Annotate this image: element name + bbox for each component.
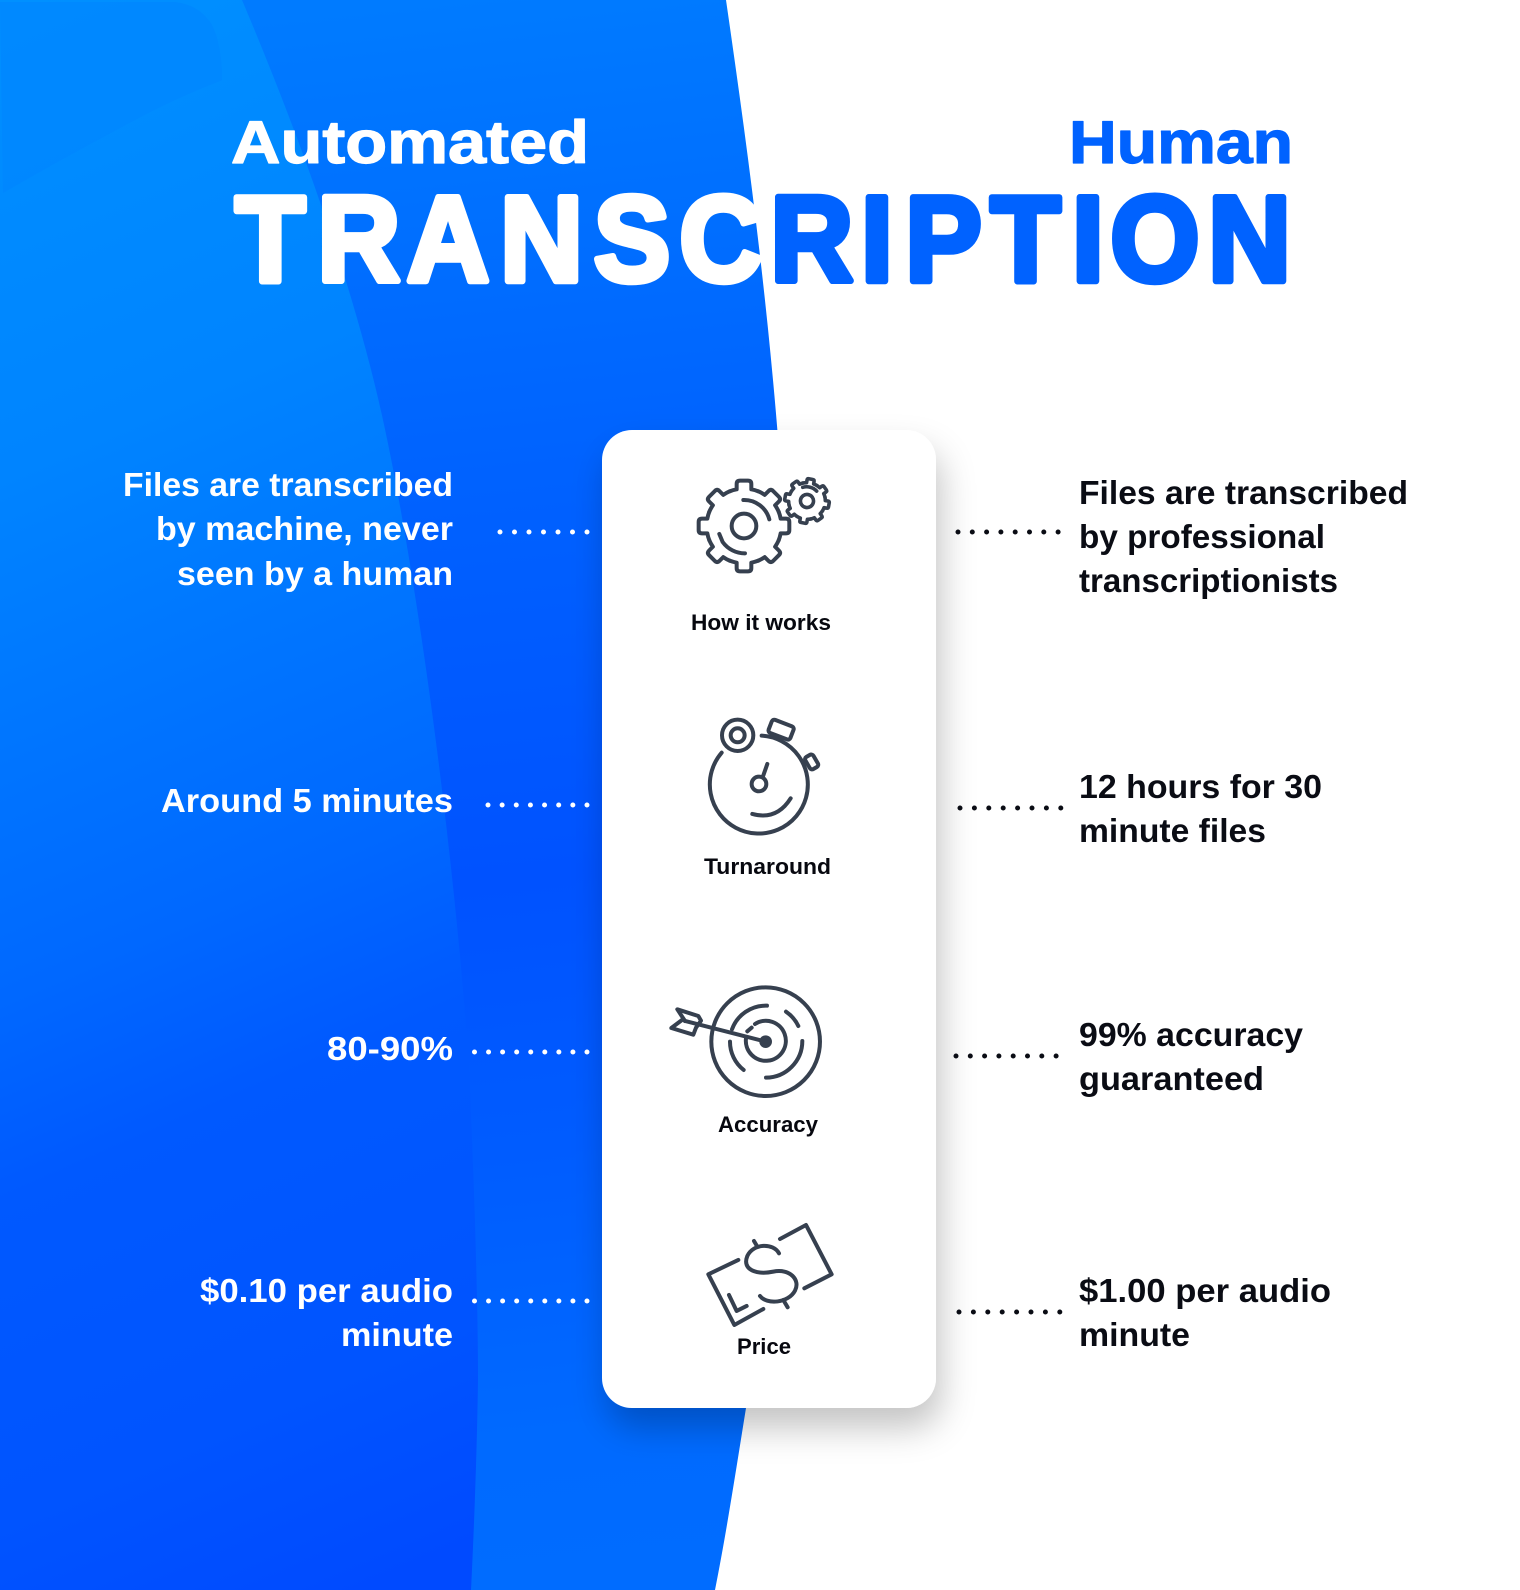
text: human how it works: transcriptionists bbox=[1079, 562, 1338, 599]
connector dots bbox=[958, 530, 1059, 534]
background: top-left faint patch bbox=[0, 2, 222, 193]
connector dots bbox=[474, 1298, 588, 1304]
icon: target with arrow bbox=[671, 987, 820, 1096]
text: automated how it works: by machine, never bbox=[156, 510, 453, 547]
title: TRANSCRIPTION bbox=[235, 172, 1291, 308]
title: Automated: Automated bbox=[231, 109, 589, 176]
connector dots bbox=[960, 806, 1062, 810]
label: Accuracy: Accuracy bbox=[718, 1112, 819, 1137]
icon: gears bbox=[699, 475, 833, 571]
label: Turnaround: Turnaround bbox=[704, 854, 831, 879]
connector dots bbox=[488, 802, 588, 808]
icon: stopwatch bbox=[710, 719, 819, 834]
text: human turnaround bbox=[1079, 768, 1322, 849]
text: automated price: minute bbox=[341, 1316, 453, 1353]
connector dots bbox=[956, 1054, 1057, 1058]
label: How it works: How it works bbox=[691, 610, 831, 635]
text: automated price bbox=[200, 1272, 453, 1353]
text: human price: minute bbox=[1079, 1316, 1190, 1353]
text: automated how it works bbox=[123, 466, 453, 592]
centre card bbox=[602, 430, 936, 1408]
title: Human: Human bbox=[1069, 109, 1293, 176]
title: TRANSCRIPTION: RIPTION bbox=[770, 172, 1291, 308]
text: human accuracy: guaranteed bbox=[1079, 1060, 1264, 1097]
text: human how it works: Files are transcribed bbox=[1079, 474, 1408, 511]
text: human accuracy: 99% accuracy bbox=[1079, 1016, 1304, 1053]
connector dots bbox=[474, 1050, 588, 1054]
text: human accuracy bbox=[1079, 1016, 1304, 1097]
text: human turnaround: 12 hours for 30 bbox=[1079, 768, 1322, 805]
background: lighter left layer bbox=[0, 0, 478, 1590]
text: human price bbox=[1079, 1272, 1331, 1353]
text: automated turnaround: Around 5 minutes bbox=[161, 782, 453, 819]
label: Price: Price bbox=[737, 1334, 791, 1359]
text: automated how it works: seen by a human bbox=[177, 555, 453, 592]
text: human turnaround: minute files bbox=[1079, 812, 1266, 849]
text: automated how it works: Files are transcribed bbox=[123, 466, 453, 503]
icon: dollar bill bbox=[708, 1225, 832, 1325]
connector dots bbox=[959, 1310, 1061, 1314]
text: human price: $1.00 per audio bbox=[1079, 1272, 1331, 1309]
text: human how it works: by professional bbox=[1079, 518, 1325, 555]
background: blue curved panel bbox=[0, 0, 792, 1590]
text: automated accuracy: 80-90% bbox=[327, 1030, 453, 1067]
title: TRANSCRIPTION: TRANSC bbox=[235, 172, 762, 308]
text: human how it works bbox=[1079, 474, 1408, 599]
text: automated price: $0.10 per audio bbox=[200, 1272, 453, 1309]
connector dots bbox=[500, 530, 588, 534]
